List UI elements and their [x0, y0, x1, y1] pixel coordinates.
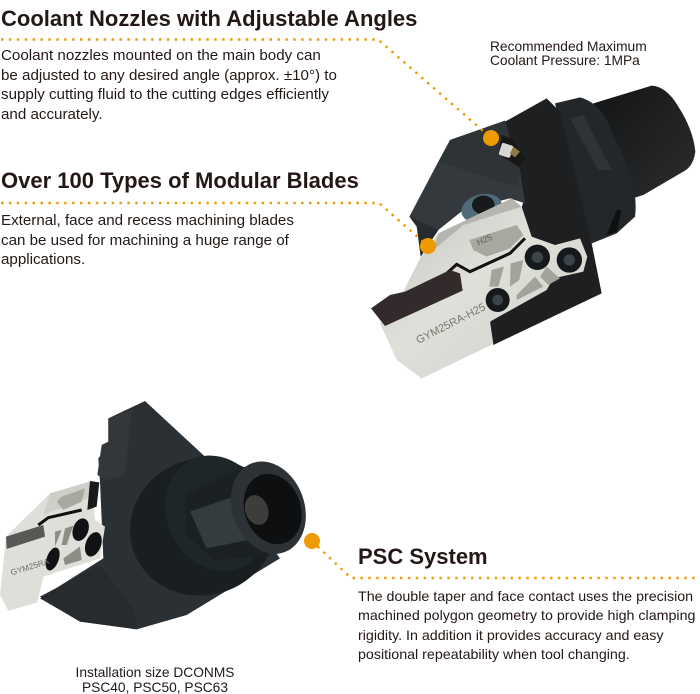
text: coolant nozzles description: be adjusted to any desired angle (approx. ±10°) to	[1, 67, 337, 84]
text: modular blades description	[1, 212, 294, 268]
silver blade	[380, 198, 587, 378]
text: coolant nozzles description: Coolant nozzles mounted on the main body can	[1, 47, 321, 64]
shank	[593, 86, 695, 203]
clamp screw	[458, 189, 505, 227]
leader: PSC system	[312, 541, 700, 578]
note: coolant pressure: Coolant Pressure: 1MPa	[490, 52, 640, 68]
leader: coolant nozzles	[1, 40, 490, 137]
collar	[110, 437, 296, 616]
text: coolant nozzles description	[1, 47, 337, 123]
note: coolant pressure	[490, 39, 647, 68]
blade pocket and slit	[57, 488, 85, 510]
heading: PSC system: PSC System	[358, 544, 488, 569]
text: modular blades description: External, face and recess machining blades	[1, 212, 294, 229]
text: coolant nozzles description: supply cutting fluid to the cutting edges efficiently	[1, 86, 329, 103]
blade screws	[69, 516, 92, 543]
marker: nozzle	[483, 130, 499, 146]
blade marking: GYM25RA-H25	[414, 301, 488, 347]
text: PSC system description: The double taper and face contact uses the precision	[358, 589, 693, 605]
main body angled face	[409, 121, 525, 257]
leader: modular blades	[1, 203, 428, 246]
marker: blade	[420, 238, 436, 254]
insert	[371, 270, 463, 326]
note: coolant pressure: Recommended Maximum	[490, 39, 647, 54]
text: modular blades description: can be used for machining a huge range of	[1, 232, 289, 248]
silver blade	[0, 481, 105, 611]
text: modular blades description: applications.	[1, 251, 85, 268]
blade slit	[447, 238, 525, 273]
heading: modular blades: Over 100 Types of Modular Blades	[1, 168, 359, 193]
marker: PSC	[304, 533, 320, 549]
text: PSC system description	[358, 589, 695, 663]
blade marking: GYM25RA	[9, 556, 51, 577]
main body front	[490, 98, 602, 345]
blade screws	[525, 245, 550, 270]
insert	[6, 525, 45, 549]
note: installation size: Installation size DCONMS	[76, 665, 234, 680]
main body	[40, 401, 280, 629]
text: PSC system description: machined polygon geometry to provide high clamping	[358, 608, 695, 624]
nozzle	[498, 135, 525, 167]
text: PSC system description: rigidity. In addition it provides accuracy and easy	[358, 628, 663, 644]
heading: coolant nozzles: Coolant Nozzles with Adjustable Angles	[1, 6, 417, 31]
shank end	[218, 451, 318, 564]
text: PSC system description: positional repeatability when tool changing.	[358, 647, 630, 663]
shank	[185, 467, 287, 560]
blade relief pockets	[469, 225, 523, 257]
collar	[555, 97, 636, 243]
note: installation size	[76, 665, 234, 694]
text: coolant nozzles description: and accurately.	[1, 106, 103, 123]
upper tool photo illustration: H25	[475, 232, 494, 247]
